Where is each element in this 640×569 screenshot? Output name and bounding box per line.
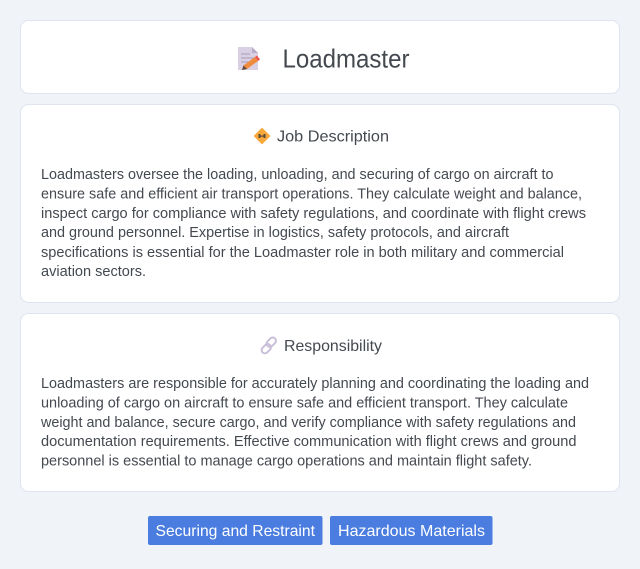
panel: responsibility: [20, 314, 620, 492]
text block: job description: [41, 167, 586, 280]
panel: job description: [20, 104, 620, 302]
text block: job description: inspect cargo for compliance with safety regulations, and coordinate with flight crews: [41, 206, 586, 222]
text block: job description: ensure safe and efficient air transport operations. They calculate weight and balance,: [41, 186, 582, 202]
text block: responsibility: unloading of cargo on aircraft to ensure safe and efficient transport. They calculate: [41, 396, 568, 412]
text block: responsibility: weight and balance, secure cargo, and verify compliance with safety regulations and: [40, 415, 576, 431]
tag: Hazardous Materials: [330, 516, 492, 545]
text block: responsibility: personnel is essential to manage cargo operations and maintain flight safety.: [41, 454, 532, 470]
text block: job description: and ground personnel. Expertise in logistics, safety protocols, and aircraft: [41, 225, 509, 241]
icon: diamond sign: [255, 129, 269, 143]
tag: Securing and Restraint: [148, 516, 322, 545]
heading: Job Description: Job Description: [277, 129, 389, 146]
text block: responsibility: [40, 376, 589, 470]
heading: Responsibility: Responsibility: [284, 338, 382, 355]
text block: job description: specifications is essential for the Loadmaster role in both military and commercial: [41, 245, 564, 261]
heading: Loadmaster: Loadmaster: [282, 46, 410, 74]
text block: responsibility: Loadmasters are responsible for accurately planning and coordinating the loading and: [41, 376, 589, 392]
text block: responsibility: documentation requirements. Effective communication with flight crews and ground: [41, 434, 576, 450]
panel: title: [20, 20, 620, 94]
tag: Securing and Restraint: Securing and Restraint: [156, 523, 316, 540]
text block: job description: aviation sectors.: [41, 264, 146, 280]
tag: Hazardous Materials: Hazardous Materials: [338, 523, 485, 540]
text block: job description: Loadmasters oversee the loading, unloading, and securing of cargo on aircraft to: [41, 167, 554, 183]
icon: chain link: [260, 336, 277, 355]
icon: document with pencil: [238, 47, 260, 70]
